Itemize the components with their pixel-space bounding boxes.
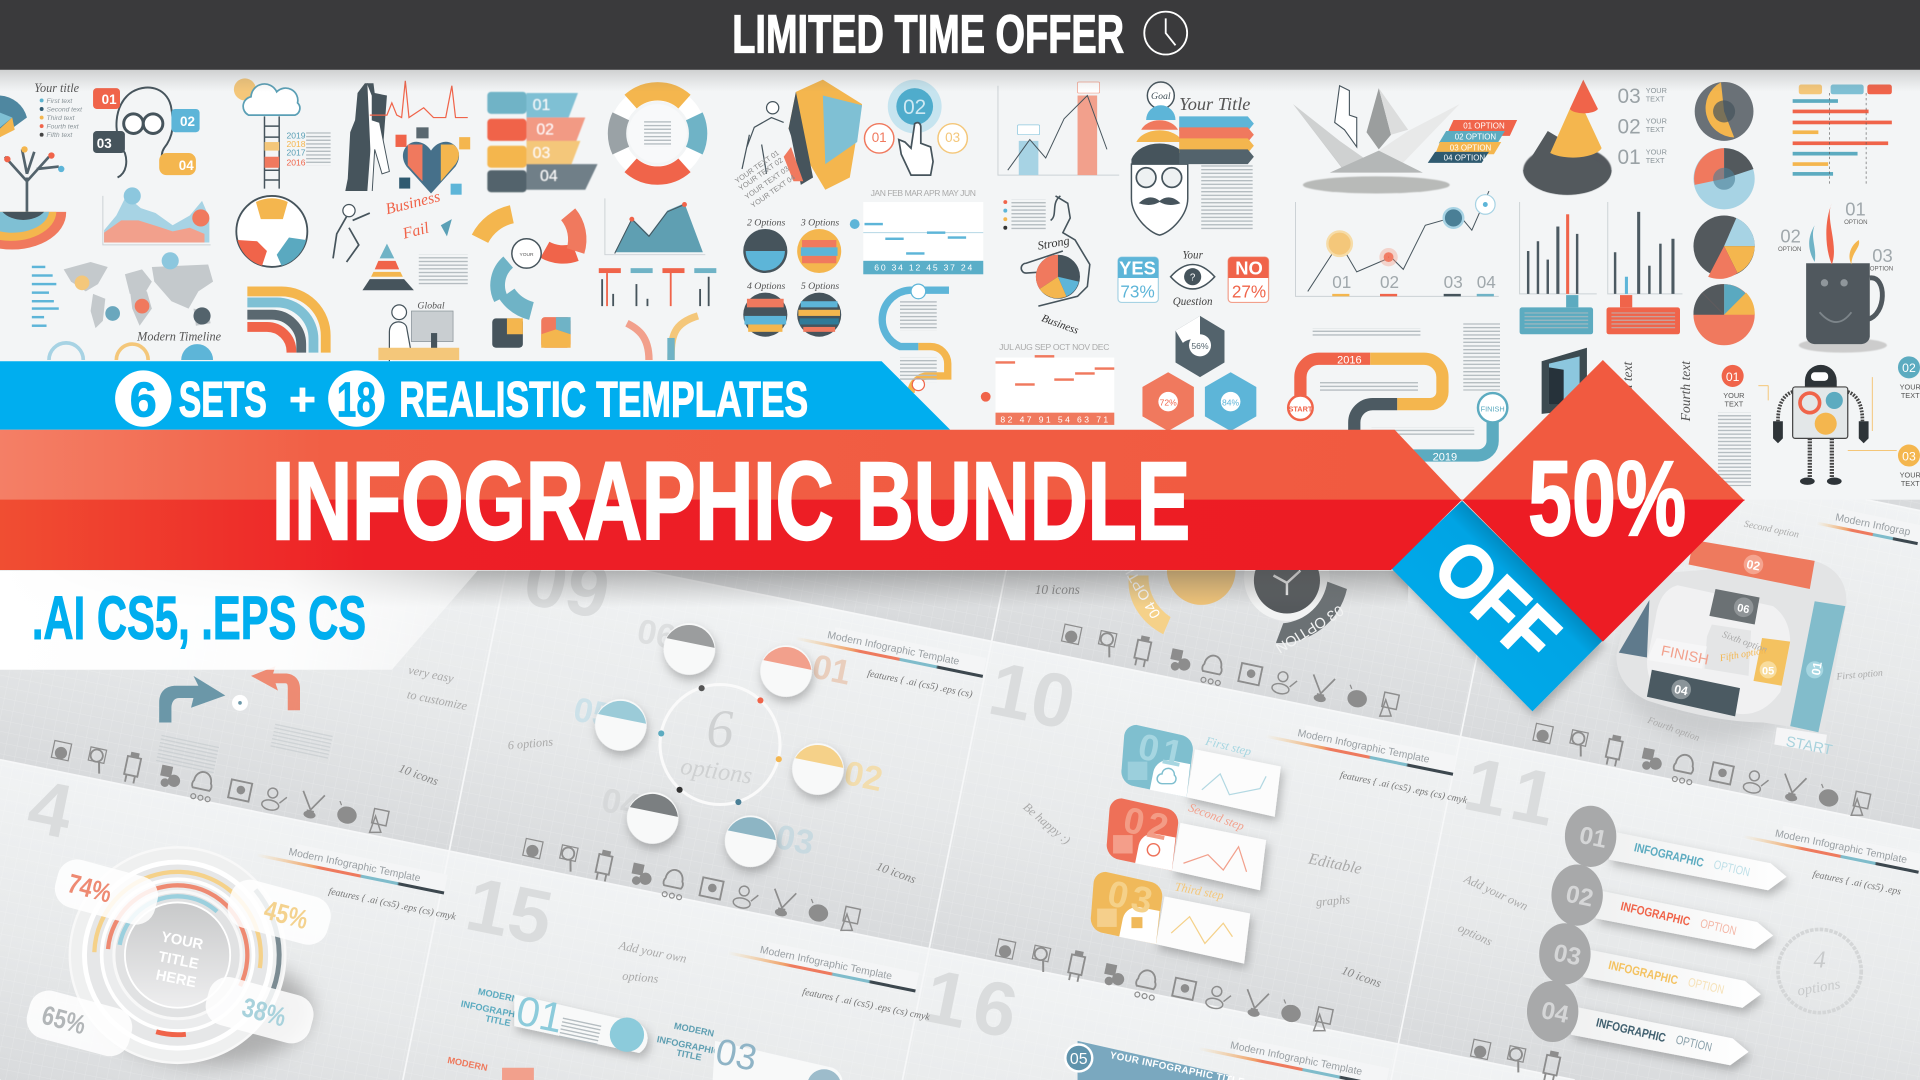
- handwritten notes: 10 icons: [1035, 582, 1080, 597]
- ribbon 02: 02: [1563, 881, 1595, 913]
- handwritten notes: [397, 582, 1530, 990]
- top cut discs: [1125, 570, 1347, 654]
- horizontal bar chart: [1793, 84, 1892, 184]
- ribbon 04: INFOGRAPHIC: [1595, 1015, 1667, 1045]
- icon: tree over rainbow: [0, 146, 66, 250]
- icon: head profile with tags: [93, 88, 200, 178]
- icon: mug with steam: OPTION: [1778, 246, 1801, 253]
- circuit diagram finish: [1616, 519, 1883, 759]
- modern infographic title bars: 01: [512, 986, 567, 1042]
- step bar chart: [850, 188, 983, 274]
- icon rows: [49, 619, 1872, 1080]
- red discount diamond: [1462, 360, 1745, 642]
- timeline snake 2016-2019: [1288, 355, 1507, 463]
- icon: clock: [1144, 12, 1187, 54]
- ribbon 03: 03: [1551, 940, 1583, 971]
- icon: robot with labels: TEXT: [1901, 391, 1920, 400]
- ribbons 01-04: 04: [540, 168, 558, 185]
- handwritten notes: options: [1456, 921, 1495, 949]
- line chart with striped bars: [998, 82, 1119, 175]
- snake timeline: [882, 284, 949, 393]
- sheets background: [0, 500, 1920, 1080]
- icon: man pushing book: YOUR TEXT 02: [737, 156, 784, 193]
- option bubbles: [590, 619, 848, 872]
- handwritten notes: Add your own: [617, 938, 688, 966]
- option stripes: 04 OPTION: [1444, 153, 1485, 162]
- red banner: [0, 430, 1462, 570]
- icon: open door: [1542, 348, 1587, 414]
- hexagons: 84%: [1222, 397, 1240, 407]
- vertical bar charts: [1520, 202, 1682, 334]
- badge: 18: 18: [337, 373, 376, 427]
- shadow under header: [0, 70, 1920, 92]
- modern infographic title bars: TITLE: [484, 1013, 511, 1028]
- ribbon 02: [1551, 864, 1773, 949]
- title bar 05: [1064, 1041, 1246, 1080]
- modern infographic title bars: 03: [712, 1031, 760, 1079]
- features notes: features { .ai (cs5) .eps (cs) cmyk: [801, 986, 931, 1023]
- circuit diagram finish: Fourth option: [1645, 715, 1701, 744]
- icon: mug with steam: OPTION: [1870, 266, 1893, 273]
- peak line chart: [1296, 191, 1499, 296]
- features notes: features { .ai (cs5) .eps (cs) cmyk: [1339, 770, 1469, 806]
- YES NO poll: 27%: [1232, 282, 1266, 302]
- text blocks: [419, 255, 937, 382]
- handwritten notes: Editable: [1306, 850, 1363, 878]
- step bar chart: JAN FEB MAR APR MAY JUN: [871, 188, 976, 198]
- blue OFF ribbon: [1391, 501, 1603, 711]
- text: Business Fail: Business: [384, 188, 442, 218]
- template strips: Modern Infographic Template: [288, 847, 422, 885]
- icon: man pushing book: YOUR TEXT 01: [733, 148, 781, 185]
- panel: format tag: [0, 571, 478, 670]
- area chart: [103, 187, 211, 245]
- YES NO poll: [1118, 249, 1269, 308]
- bar list: [32, 266, 59, 327]
- icon: pie with legend: Fifth text: [47, 132, 73, 139]
- ribbon 03: INFOGRAPHIC: [1607, 958, 1680, 987]
- icon: mug with steam: [1778, 199, 1893, 353]
- badge: 6: [115, 370, 171, 427]
- step cards with charts: [1091, 725, 1281, 964]
- icon: man pushing book: [733, 80, 862, 210]
- step labels: First step: [1203, 734, 1253, 759]
- 4 options ring: [1778, 929, 1861, 1013]
- icon: cone stack: TEXT: [1646, 125, 1665, 134]
- monthly step chart: 82 47 91 54 63 71: [1000, 414, 1108, 424]
- icon: cone stack: 02: [1618, 115, 1641, 138]
- icon: paper boat: [1293, 86, 1460, 193]
- ghost option numbers: 06: [634, 612, 679, 657]
- icon: desk man: Global: [417, 301, 445, 312]
- icon: ECG line: [370, 81, 468, 118]
- world map: [64, 252, 213, 328]
- text: Business Fail: Fail: [400, 220, 431, 243]
- ribbon 03: [1539, 923, 1761, 1008]
- circuit diagram finish: Sixth option: [1721, 629, 1769, 656]
- ghost numbers: 4: [21, 764, 79, 855]
- step labels: Second step: [1187, 800, 1246, 833]
- rounded puzzle circle: [236, 196, 307, 267]
- handwritten notes: to customize: [406, 687, 469, 713]
- peak line chart: 03: [1444, 272, 1463, 292]
- ribbon 01: 01: [1577, 822, 1609, 854]
- hexagons: [1142, 316, 1256, 431]
- option stripes: 03 OPTION: [1450, 144, 1492, 153]
- percent pills: [22, 855, 335, 1061]
- percent pills: 74%: [65, 868, 115, 909]
- icon: bearded goal man: Your Title: [1179, 94, 1250, 114]
- icon: cone stack: 03: [1618, 85, 1641, 108]
- option stripes: [1428, 120, 1517, 163]
- text: sets: SETS: [179, 371, 267, 427]
- icon: cloud ladder: 2019: [287, 130, 306, 140]
- half circles: [49, 343, 148, 360]
- icon: pie with legend: Second text: [47, 106, 83, 113]
- handwritten notes: graphs: [1315, 892, 1351, 909]
- icon: cone stack: YOUR: [1646, 117, 1667, 126]
- icon: mug with steam: OPTION: [1844, 219, 1868, 226]
- icon: cone stack: 01: [1618, 146, 1641, 169]
- 6 options circle chart: options: [679, 753, 754, 790]
- circuit diagram finish: 02: [1745, 557, 1762, 574]
- step card 01: [1121, 725, 1281, 817]
- ribbons 01-04: [487, 92, 598, 192]
- arrow labels: [1179, 116, 1254, 230]
- rainbow L stripes: [247, 291, 326, 353]
- ghost numbers: [21, 536, 1572, 1056]
- YES NO poll: Your: [1182, 249, 1204, 261]
- 6 options circle chart: 6: [707, 699, 734, 759]
- ghost option numbers: 01: [809, 648, 854, 693]
- peak line chart: 02: [1380, 272, 1399, 292]
- icon: robot with labels: YOUR: [1723, 391, 1744, 400]
- buttons with hand: 01: [872, 130, 887, 145]
- branch arrows: [627, 316, 698, 360]
- template strips: Modern Infographic Template: [1229, 1040, 1363, 1078]
- circuit diagram finish: 01: [1809, 660, 1825, 676]
- text: plus: +: [289, 373, 316, 425]
- icon: head profile with tags: 01: [102, 92, 117, 107]
- ribbon 02: INFOGRAPHIC: [1619, 899, 1692, 929]
- percent pills: 38%: [239, 992, 289, 1032]
- ribbon 02: OPTION: [1699, 916, 1738, 938]
- icon: robot with labels: TEXT: [1725, 400, 1744, 409]
- top cut discs: 04 OPTION: [1112, 546, 1164, 621]
- text: file formats: .AI CS5, .EPS CS: [32, 584, 366, 652]
- icon: cloud ladder: 2018: [287, 139, 306, 149]
- monthly step chart: [981, 342, 1114, 425]
- icon: robot with labels: [1718, 356, 1920, 488]
- donut ring chart: [617, 91, 698, 176]
- features notes: features { .ai (cs5) .eps (cs): [866, 668, 973, 700]
- icon: robot with labels: 02: [1902, 361, 1916, 375]
- badge: 6: 6: [130, 373, 157, 427]
- icon: cone stack: [1523, 80, 1667, 195]
- text: 50%: 50%: [1528, 439, 1686, 558]
- ribbon 01: [1565, 806, 1787, 890]
- text: Business Fail: [384, 188, 442, 243]
- icon: cloud ladder: 2016: [287, 157, 306, 167]
- text lines: [1313, 323, 1500, 436]
- peak line chart: 04: [1477, 272, 1496, 292]
- ribbon 03: OPTION: [1687, 975, 1726, 997]
- donut charts: options: 3 Options: [800, 217, 839, 228]
- timeline snake 2016-2019: 2019: [1433, 451, 1457, 463]
- text: Modern Timeline: Modern Timeline: [136, 329, 222, 343]
- handwritten notes: 10 icons: [1340, 963, 1383, 990]
- rotated handwritten labels: third text: [1620, 361, 1635, 410]
- modern infographic title bars: INFOGRAPHIC: [460, 999, 525, 1021]
- icon: robot with labels: TEXT: [1901, 479, 1920, 488]
- icon: desk man: [378, 301, 459, 361]
- donut charts: options: [743, 217, 841, 337]
- circuit diagram finish: Fifth option: [1718, 645, 1767, 664]
- panel: blue sets band: [0, 361, 950, 430]
- icon: cycle hub: YOUR: [519, 252, 534, 258]
- template strips: Modern Infographic Template: [1296, 728, 1431, 766]
- icon: cone stack: YOUR: [1646, 147, 1667, 156]
- icon: man running and pyramid: [333, 204, 452, 290]
- title: limited time offer: LIMITED TIME OFFER: [732, 5, 1124, 65]
- title bar 05: 05: [1070, 1051, 1088, 1068]
- features notes: features { .ai (cs5) .eps (cs) cmyk: [328, 886, 457, 923]
- icon: robot with labels: 03: [1902, 449, 1916, 463]
- ribbons 01-04: 01: [533, 97, 550, 114]
- modern infographic title bars: TITLE: [676, 1048, 702, 1063]
- icon: pie with legend: Fourth text: [47, 124, 80, 131]
- circuit diagram finish: Second option: [1743, 519, 1800, 541]
- handwritten notes: Add your own: [1461, 871, 1530, 913]
- step labels: [1174, 734, 1253, 903]
- buttons with hand: [864, 80, 967, 175]
- mini bar charts: [599, 268, 716, 306]
- timeline snake 2016-2019: START: [1288, 404, 1313, 413]
- template strips: Modern Infographic Template: [1774, 829, 1908, 866]
- ribbons 01-04: 02: [536, 122, 554, 139]
- panel: lower perspective template sheets: [0, 500, 1920, 1080]
- 4 options ring: 4: [1813, 946, 1826, 973]
- handwritten notes: 10 icons: [874, 859, 918, 886]
- template strips: Modern Infograp: [1834, 512, 1911, 538]
- icon: bearded goal man: [1131, 82, 1250, 235]
- circuit diagram finish: First option: [1835, 668, 1883, 683]
- handwritten notes: very easy: [407, 663, 455, 686]
- ribbon 01: INFOGRAPHIC: [1633, 840, 1705, 870]
- title: infographic bundle: INFOGRAPHIC BUNDLE: [272, 440, 1190, 563]
- icon: arrows left: [156, 666, 333, 773]
- YES NO poll: ?: [1190, 272, 1196, 283]
- icon: head profile with tags: 02: [180, 114, 195, 129]
- ghost option numbers: 03: [772, 818, 817, 863]
- icon: pie with legend: Your title: [34, 81, 80, 95]
- background: light collage area: [0, 0, 1920, 514]
- icon: mug with steam: 03: [1872, 245, 1893, 266]
- ribbons 01-04: 03: [533, 145, 550, 162]
- ghost numbers: 11: [1457, 742, 1572, 845]
- icon: striped man: [345, 83, 389, 191]
- handwritten notes: Be happy :): [1021, 800, 1073, 847]
- icon: head profile with tags: 04: [179, 158, 194, 173]
- ring chart with percent pills: HERE: [154, 967, 198, 991]
- modern infographic title bars: MODERN: [673, 1021, 715, 1039]
- icon: man pushing book: YOUR TEXT 04: [749, 173, 797, 210]
- icon: cone stack: TEXT: [1646, 156, 1665, 165]
- icon: pie with legend: Third text: [47, 115, 76, 122]
- template strips: [257, 505, 1920, 1080]
- timeline snake 2016-2019: FINISH: [1481, 404, 1505, 413]
- rotated handwritten labels: [1620, 361, 1693, 422]
- handwritten notes: options: [622, 969, 659, 986]
- template strips: Modern Infographic Template: [759, 945, 893, 983]
- donut charts: options: 2 Options: [747, 217, 785, 228]
- icon: mug with steam: 01: [1845, 199, 1866, 220]
- top cut discs: 03 OPTION: [1272, 602, 1346, 656]
- ribbon 04: [1527, 981, 1749, 1065]
- buttons with hand: 03: [945, 130, 960, 145]
- step bar chart: 60 34 12 45 37 24: [874, 263, 972, 273]
- ring chart with percent pills: YOUR: [160, 929, 205, 954]
- ghost numbers: 16: [917, 953, 1032, 1056]
- percent pills: 45%: [261, 895, 311, 935]
- ghost option numbers: 05: [570, 691, 615, 735]
- step card 02: 02: [1120, 799, 1175, 849]
- ghost option numbers: [570, 612, 886, 863]
- icon: cycle hub: [498, 239, 541, 299]
- icon: square charts: [492, 317, 571, 348]
- circuit diagram finish: 06: [1736, 602, 1751, 616]
- ghost numbers: 15: [459, 862, 559, 962]
- ghost option numbers: 04: [598, 781, 643, 826]
- icon: cloud ladder: 2017: [287, 148, 306, 158]
- icon: head profile with tags: 03: [97, 136, 112, 151]
- icon: mug with steam: 02: [1780, 225, 1801, 246]
- four option ribbons: [1527, 806, 1787, 1065]
- text: realistic templates: REALISTIC TEMPLATES: [399, 371, 808, 427]
- legend: Strong arm: Strong: [1036, 233, 1071, 253]
- legend: Strong arm: Business: [1040, 312, 1080, 337]
- handwritten notes: 10 icons: [397, 761, 441, 788]
- icon: man pushing book: YOUR TEXT 03: [743, 164, 791, 201]
- 4 options ring: options: [1796, 976, 1842, 1000]
- features notes: features { .ai (cs5) .eps: [1812, 869, 1902, 898]
- icon: pie with legend: First text: [47, 98, 73, 105]
- YES NO poll: NO: [1235, 257, 1263, 278]
- header bar: [0, 0, 1920, 70]
- icon: pie with legend: [0, 81, 83, 139]
- YES NO poll: YES: [1119, 257, 1156, 278]
- timeline snake 2016-2019: 2016: [1337, 355, 1362, 367]
- features notes: [328, 668, 1902, 1023]
- ring chart with percent pills: [26, 846, 331, 1074]
- donut charts: options: 5 Options: [801, 281, 839, 292]
- icon: heart chart: [396, 127, 470, 195]
- YES NO poll: 73%: [1120, 282, 1155, 302]
- handwritten notes: 6 options: [507, 734, 554, 752]
- icon: robot with labels: 01: [1726, 370, 1740, 384]
- rotated handwritten labels: Fourth text: [1678, 361, 1693, 422]
- icon: cone stack: TEXT: [1646, 95, 1665, 104]
- icon: cycle arrows: [480, 214, 577, 311]
- step labels: Third step: [1174, 879, 1225, 903]
- modern infographic title bars: MODERN: [477, 986, 519, 1004]
- panel: upper infographic collage: [0, 78, 1920, 488]
- donut charts: options: 4 Options: [747, 281, 785, 292]
- circuit diagram finish: 05: [1762, 666, 1774, 678]
- shadow under banner: [0, 571, 1408, 607]
- monthly step chart: JUL AUG SEP OCT NOV DEC: [999, 342, 1109, 352]
- percent pills: 65%: [39, 1000, 89, 1040]
- 6 options circle chart: [658, 684, 782, 805]
- ghost numbers: 09: [517, 536, 617, 636]
- ring chart with percent pills: TITLE: [157, 949, 200, 973]
- buttons with hand: 02: [903, 96, 926, 119]
- text: off: OFF: [1417, 523, 1575, 680]
- step card 01: 01: [1135, 726, 1190, 775]
- modern infographic title bars: [447, 986, 842, 1080]
- mountain chart: [605, 198, 705, 255]
- four pie circles: [1693, 81, 1755, 345]
- icon: cloud ladder: [234, 78, 331, 189]
- icon: cone stack: YOUR: [1646, 86, 1667, 95]
- modern infographic title bars: INFOGRAPHIC: [656, 1034, 721, 1057]
- ribbon 01: OPTION: [1712, 857, 1751, 879]
- step card 03: 03: [1104, 873, 1160, 922]
- hexagons: 72%: [1160, 397, 1177, 407]
- template strips: Modern Infographic Template: [826, 630, 960, 668]
- ghost option numbers: 02: [841, 754, 886, 799]
- hexagons: 56%: [1191, 341, 1209, 351]
- legend: Strong arm: [1003, 196, 1090, 337]
- peak line chart: 01: [1332, 272, 1351, 292]
- modern infographic title bars: MODERN: [447, 1055, 488, 1073]
- ghost numbers: 10: [982, 646, 1082, 746]
- option stripes: 02 OPTION: [1455, 133, 1496, 142]
- icon: bearded goal man: Goal: [1151, 91, 1171, 102]
- step card 03: [1091, 872, 1250, 964]
- circuit diagram finish: FINISH: [1660, 643, 1710, 669]
- YES NO poll: Question: [1173, 296, 1213, 308]
- option stripes: 01 OPTION: [1463, 122, 1505, 131]
- circuit diagram finish: 04: [1673, 682, 1689, 699]
- step card 02: [1107, 798, 1266, 890]
- ribbon 04: OPTION: [1674, 1033, 1713, 1054]
- circuit diagram finish: START: [1785, 734, 1834, 759]
- ribbon 04: 04: [1539, 997, 1571, 1029]
